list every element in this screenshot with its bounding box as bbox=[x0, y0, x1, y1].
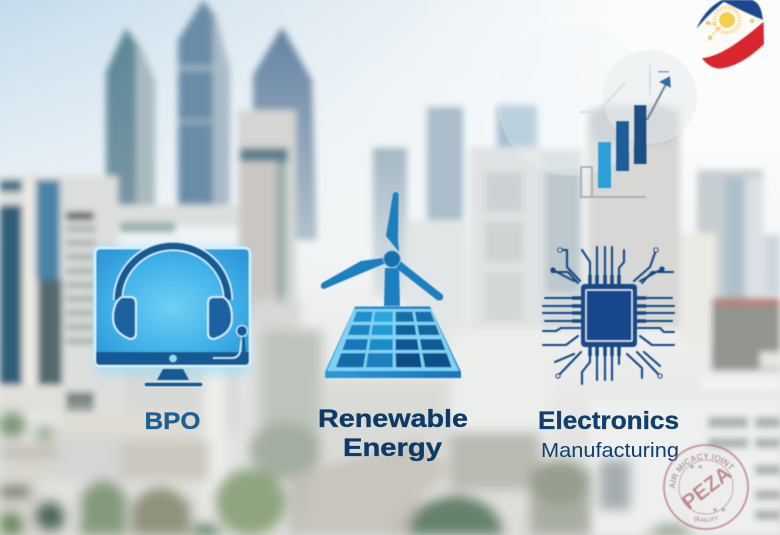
label: Electronics Manufacturing bbox=[538, 407, 679, 462]
monitor screen bbox=[95, 246, 250, 387]
label: Renewable Energy: Renewable bbox=[318, 405, 468, 433]
icon: Philippine flag badge bbox=[696, 0, 764, 68]
stamp: PEZA seal: ★ ★ bbox=[712, 506, 726, 514]
icon: wind turbine on solar panel bbox=[321, 192, 461, 378]
label: Renewable Energy bbox=[318, 405, 468, 462]
chip pin stubs bbox=[572, 275, 646, 356]
trace pads bbox=[551, 248, 664, 378]
stamp: PEZA seal: ★ ★ bbox=[689, 463, 704, 471]
label: Electronics Manufacturing: Electronics bbox=[538, 407, 679, 435]
solar cells bbox=[336, 312, 452, 367]
label: BPO: BPO bbox=[144, 408, 200, 435]
lower town and trees bbox=[0, 300, 696, 535]
icon: circuit chip bbox=[543, 247, 674, 384]
stamp: PEZA seal: AIR MICACY IOINT bbox=[669, 452, 735, 489]
label: Electronics Manufacturing: Manufacturing bbox=[541, 440, 679, 462]
label: Renewable Energy: Energy bbox=[343, 434, 442, 462]
growth chart with arrow bbox=[497, 24, 697, 197]
icon: BPO monitor with headset bbox=[95, 246, 250, 387]
stamp: PEZA seal bbox=[662, 444, 750, 530]
chip traces bbox=[543, 247, 674, 384]
stamp: PEZA seal: PEZA bbox=[678, 462, 736, 514]
stamp: PEZA seal: QUALITY bbox=[694, 516, 718, 522]
